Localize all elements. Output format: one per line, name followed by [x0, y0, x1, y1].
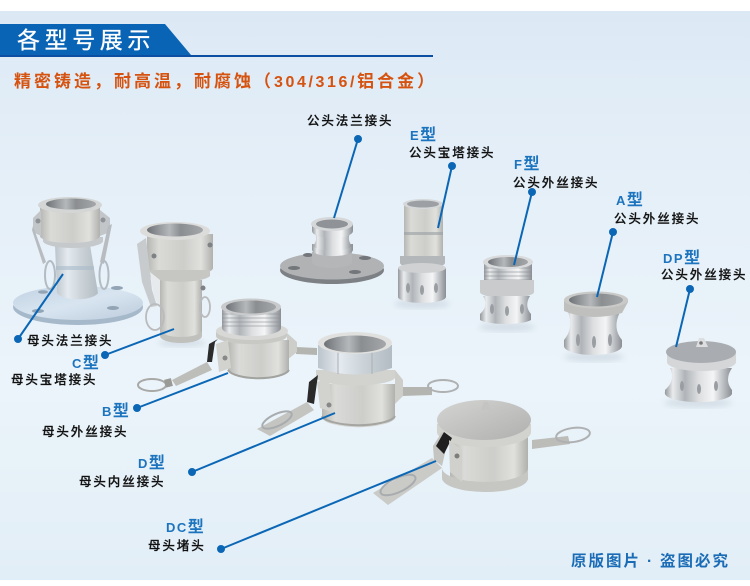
product: B type coupler — [138, 298, 317, 391]
label: F type: F型 — [514, 155, 539, 173]
copyright notice: · — [647, 553, 654, 570]
label: B type: B型 — [102, 402, 129, 420]
product: DP type dust plug — [664, 338, 736, 408]
label: E type: 公头宝塔接头 — [409, 145, 495, 160]
label: B type — [42, 402, 129, 439]
product: F type camlock — [479, 255, 535, 332]
subtitle: 精密铸造，耐高温，耐腐蚀（304/316/铝合金） — [14, 71, 437, 91]
label: DP type: DP型 — [663, 249, 700, 267]
leader lines — [15, 136, 693, 552]
label: D type — [79, 454, 165, 489]
label: DC type — [148, 518, 206, 553]
product: A type camlock — [564, 292, 628, 362]
title banner: 各型号展示 — [17, 27, 155, 53]
label: C type: 母头宝塔接头 — [11, 372, 97, 387]
label: DC type: 母头堵头 — [148, 538, 206, 553]
copyright notice: 原版图片 — [571, 552, 641, 570]
label: mother flange: 母头法兰接头 — [27, 333, 113, 348]
label: DP type: 公头外丝接头 — [661, 267, 747, 282]
label: D type: D型 — [138, 454, 165, 472]
label: DP type — [661, 249, 747, 282]
label: E type — [409, 126, 495, 160]
copyright notice: 盗图必究 — [660, 551, 730, 570]
label: C type: C型 — [72, 354, 99, 372]
label: DC type: DC型 — [166, 518, 204, 536]
label: A type: 公头外丝接头 — [614, 211, 700, 226]
label: F type — [513, 155, 599, 190]
product: C type coupler — [137, 222, 213, 347]
label: F type: 公头外丝接头 — [513, 175, 599, 190]
product: male flange adapter — [280, 217, 384, 284]
label: B type: 母头外丝接头 — [42, 424, 128, 439]
label: male flange: 公头法兰接头 — [307, 113, 393, 128]
title banner — [0, 24, 433, 57]
label: A type — [614, 191, 700, 226]
product: mother flange coupler — [13, 197, 143, 325]
product: E type camlock — [394, 199, 450, 309]
label: E type: E型 — [410, 126, 436, 144]
product: D type coupler — [257, 332, 458, 436]
product: DC type dust cap — [373, 400, 591, 505]
label: D type: 母头内丝接头 — [79, 474, 165, 489]
label: A type: A型 — [616, 191, 643, 209]
label: C type — [11, 354, 99, 387]
